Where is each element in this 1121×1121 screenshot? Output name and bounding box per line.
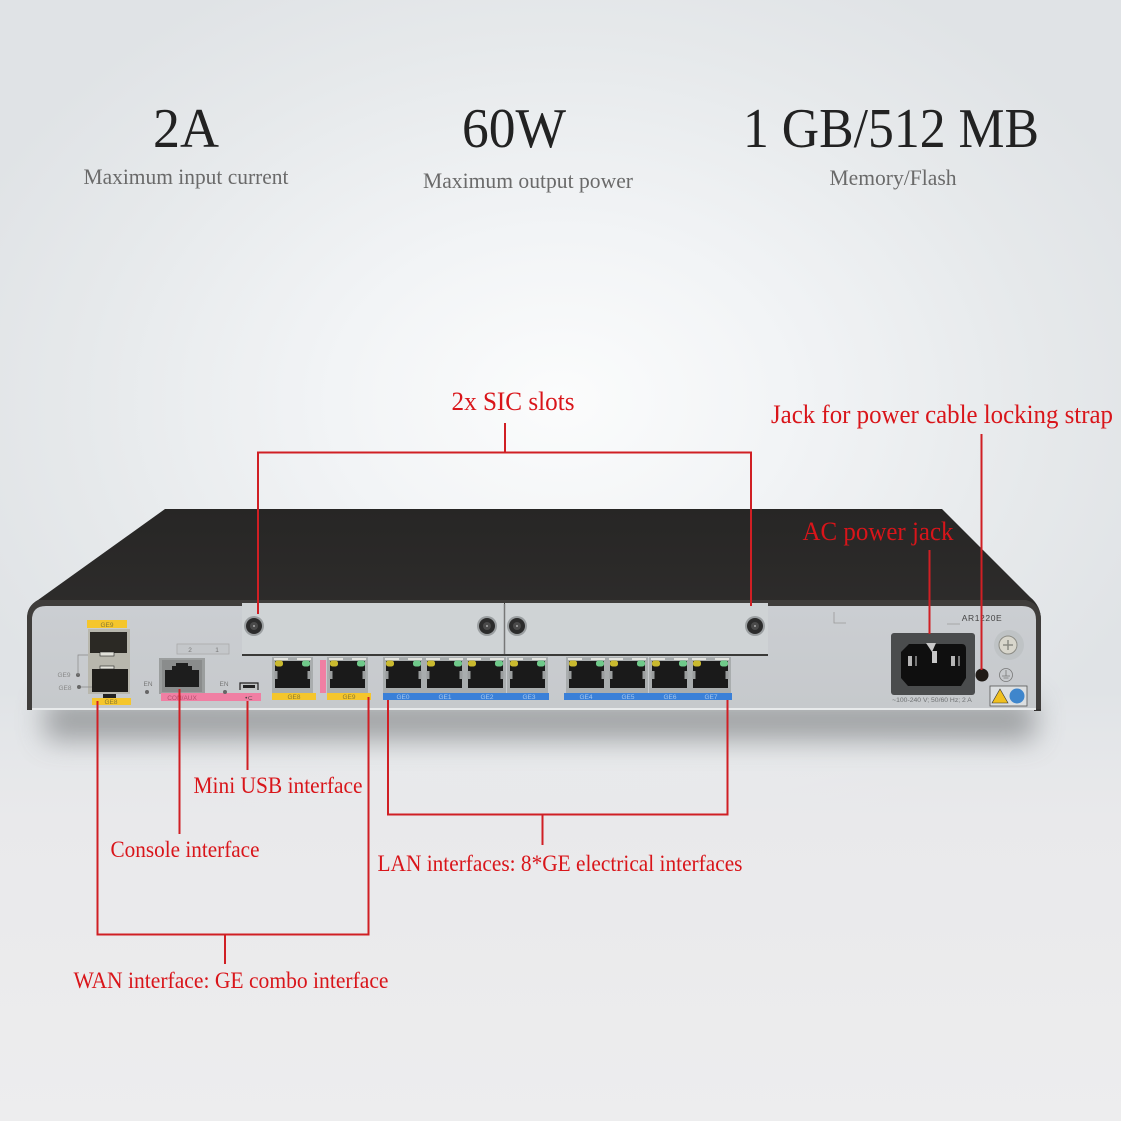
console port: 1 — [215, 647, 219, 654]
LAN ports GE4 to GE7: GE7 — [704, 694, 718, 701]
router device — [27, 509, 1041, 740]
stat: maximum input current — [84, 98, 289, 189]
mini USB port: •⊂ — [245, 695, 253, 702]
LAN ports GE4 to GE7: GE4 — [579, 694, 593, 701]
callout: console: Console interface — [110, 837, 260, 862]
callout: SIC slots — [258, 387, 751, 614]
SFP combo ports — [57, 620, 131, 706]
LAN ports GE0 to GE3: GE1 — [438, 694, 452, 701]
callout: LAN interfaces — [378, 700, 743, 876]
chassis top — [27, 509, 1041, 711]
callout: AC power jack: AC power jack — [802, 517, 954, 546]
SIC slots — [242, 603, 768, 655]
stat: memory and flash — [743, 98, 1039, 190]
callout: mini USB: Mini USB interface — [194, 773, 362, 798]
stat: maximum output power: Maximum output power — [423, 168, 633, 193]
LAN ports GE0 to GE3 — [383, 657, 549, 701]
stat: maximum output power — [423, 98, 633, 193]
front panel — [32, 606, 1036, 708]
LAN ports GE0 to GE3: GE0 — [396, 694, 410, 701]
AC power socket — [891, 633, 975, 704]
model label and ground screw — [834, 612, 1024, 682]
GE8 and GE9 RJ45 ports — [272, 657, 371, 701]
LAN ports GE4 to GE7: GE6 — [663, 694, 677, 701]
console port: CON/AUX — [167, 695, 197, 702]
SFP combo ports: GE8 — [58, 685, 72, 692]
console port — [143, 644, 261, 702]
SFP combo ports: GE9 — [57, 672, 71, 679]
callout: SIC slots: 2x SIC slots — [452, 387, 574, 416]
floor reflection — [0, 690, 1121, 1121]
callout: WAN interface: WAN interface: GE combo interface — [74, 968, 388, 993]
warning labels — [990, 686, 1027, 706]
LAN ports GE4 to GE7: GE5 — [621, 694, 635, 701]
LAN ports GE0 to GE3: GE3 — [522, 694, 536, 701]
device shadow — [45, 700, 1035, 740]
stat: maximum input current: Maximum input current — [84, 164, 289, 189]
AC power socket: ~100-240 V; 50/60 Hz; 2 A — [892, 697, 972, 704]
SFP combo ports: GE9 — [100, 622, 114, 629]
mini USB port — [219, 681, 258, 702]
callout: LAN interfaces: LAN interfaces: 8*GE electrical interfaces — [378, 851, 743, 876]
GE8 and GE9 RJ45 ports: GE9 — [342, 694, 356, 701]
callout: power cable locking strap jack: Jack for power cable locking strap — [771, 400, 1113, 429]
GE8 and GE9 RJ45 ports: GE8 — [287, 694, 301, 701]
LAN ports GE4 to GE7 — [564, 657, 732, 701]
stat: maximum output power: 60W — [462, 98, 566, 160]
LAN ports GE0 to GE3: GE2 — [480, 694, 494, 701]
stat: maximum input current: 2A — [153, 98, 220, 160]
model label and ground screw: AR1220E — [962, 613, 1002, 623]
mini USB port: EN — [219, 681, 229, 688]
callout: WAN interface — [74, 697, 388, 993]
SFP combo ports: GE8 — [104, 699, 118, 706]
console port: 2 — [188, 647, 192, 654]
stat: memory and flash: Memory/Flash — [830, 165, 956, 190]
console port: EN — [143, 681, 153, 688]
stat: memory and flash: 1 GB/512 MB — [743, 98, 1039, 160]
